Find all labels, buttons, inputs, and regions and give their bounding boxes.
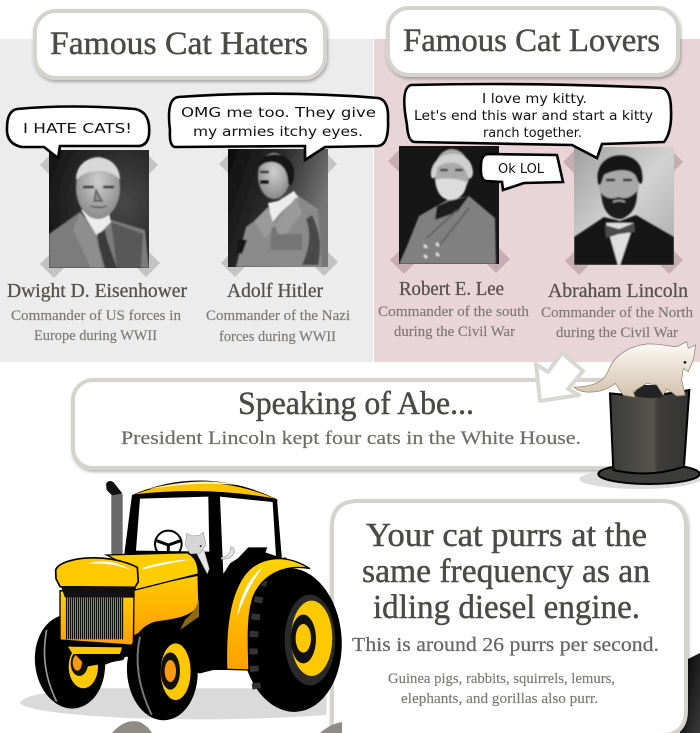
caption: Abraham Lincoln: Abraham Lincoln bbox=[548, 281, 688, 302]
callout: purr frequency bbox=[332, 501, 686, 733]
caption: Robert E. Lee: Commander of the south bbox=[378, 304, 530, 320]
caption: Abraham Lincoln: Commander of the North bbox=[541, 305, 694, 321]
caption: Adolf Hitler bbox=[206, 281, 350, 345]
caption: Adolf Hitler: forces during WWII bbox=[219, 329, 336, 345]
portrait: Robert E. Lee bbox=[388, 146, 510, 274]
portrait: Abraham Lincoln bbox=[563, 147, 683, 275]
heading: Famous Cat Haters: Famous Cat Haters bbox=[50, 26, 308, 62]
speech bubble: I love my kitty: Let's end this war and start a kitty bbox=[414, 109, 653, 124]
speech bubble: Ok LOL bbox=[481, 154, 563, 190]
front left tire bbox=[30, 611, 110, 712]
caption: Adolf Hitler: Adolf Hitler bbox=[227, 281, 324, 302]
hood front bbox=[56, 558, 138, 587]
caption: Robert E. Lee: during the Civil War bbox=[394, 324, 515, 340]
grille bbox=[66, 597, 123, 639]
callout heading: idling diesel engine. bbox=[373, 589, 640, 626]
arrow: pointing to callout bbox=[536, 353, 583, 401]
callout heading bbox=[362, 517, 650, 626]
steering wheel bbox=[155, 531, 182, 557]
other purring animals: elephants, and gorillas also purr. bbox=[401, 691, 598, 707]
speech bubble: I love my kitty bbox=[404, 84, 671, 158]
callout: Speaking of Abe bbox=[73, 353, 643, 468]
icon: cat on top hat bbox=[574, 342, 700, 489]
decoration: grey shape beside callout bbox=[320, 722, 342, 733]
other purring animals: Guinea pigs, rabbits, squirrels, lemurs, bbox=[388, 671, 615, 687]
chassis bbox=[67, 557, 287, 673]
caption: Robert E. Lee: Robert E. Lee bbox=[399, 279, 504, 300]
speech bubble: I love my kitty: I love my kitty. bbox=[482, 92, 587, 107]
caption: Dwight D. Eisenhower: Commander of US forces in bbox=[11, 308, 182, 324]
panel: cat haters background bbox=[0, 39, 373, 362]
purr rate: This is around 26 purrs per second. bbox=[352, 634, 659, 656]
heading: Famous Cat Lovers: Famous Cat Lovers bbox=[403, 23, 660, 59]
caption: Dwight D. Eisenhower: Europe during WWII bbox=[34, 328, 157, 344]
portrait: Adolf Hitler bbox=[219, 149, 338, 277]
speech bubble: I HATE CATS: I HATE CATS! bbox=[23, 122, 132, 137]
speech bubble: I HATE CATS bbox=[7, 106, 149, 158]
callout heading: Speaking of Abe... bbox=[238, 386, 474, 422]
illustration: tractor with cat bbox=[20, 481, 347, 722]
other purring animals bbox=[388, 671, 615, 707]
caption: Robert E. Lee bbox=[378, 279, 530, 340]
heading: Famous Cat Lovers bbox=[388, 8, 678, 75]
hood top bbox=[107, 553, 198, 590]
speech bubble: OMG me too: OMG me too. They give bbox=[181, 106, 376, 121]
cab frame bbox=[124, 481, 282, 577]
small cat bbox=[185, 532, 234, 574]
panel: cat lovers background bbox=[374, 39, 700, 362]
callout text: President Lincoln kept four cats in the White House. bbox=[121, 428, 581, 449]
callout heading: Your cat purrs at the bbox=[366, 517, 647, 554]
caption: Dwight D. Eisenhower bbox=[7, 281, 188, 344]
ground shadow bbox=[20, 688, 327, 719]
front right tire bbox=[124, 619, 200, 722]
caption: Adolf Hitler: Commander of the Nazi bbox=[206, 308, 350, 324]
hood side bbox=[133, 575, 199, 637]
caption: Dwight D. Eisenhower: Dwight D. Eisenhower bbox=[7, 281, 188, 302]
caption: Abraham Lincoln bbox=[541, 281, 694, 341]
rear wheel rim bbox=[285, 595, 335, 685]
front bumper bbox=[60, 640, 130, 667]
callout heading: same frequency as an bbox=[362, 553, 650, 590]
heading: Famous Cat Haters bbox=[35, 11, 325, 78]
roof bbox=[135, 482, 275, 499]
caption: Abraham Lincoln: during the Civil War bbox=[556, 325, 678, 341]
rear tire bbox=[237, 565, 347, 715]
grille housing bbox=[60, 591, 134, 645]
speech bubble: I love my kitty: ranch together. bbox=[483, 126, 582, 141]
exhaust pipe bbox=[111, 491, 123, 555]
speech bubble: OMG me too: my armies itchy eyes. bbox=[193, 125, 363, 140]
fender bbox=[226, 559, 310, 670]
speech bubble: Ok LOL: Ok LOL bbox=[498, 162, 545, 177]
speech bubble: OMG me too bbox=[169, 94, 388, 160]
decoration: black shape at bottom right bbox=[680, 653, 700, 733]
decoration: grey shape at bottom left bbox=[112, 721, 152, 733]
portrait: Dwight D. Eisenhower bbox=[40, 150, 160, 278]
